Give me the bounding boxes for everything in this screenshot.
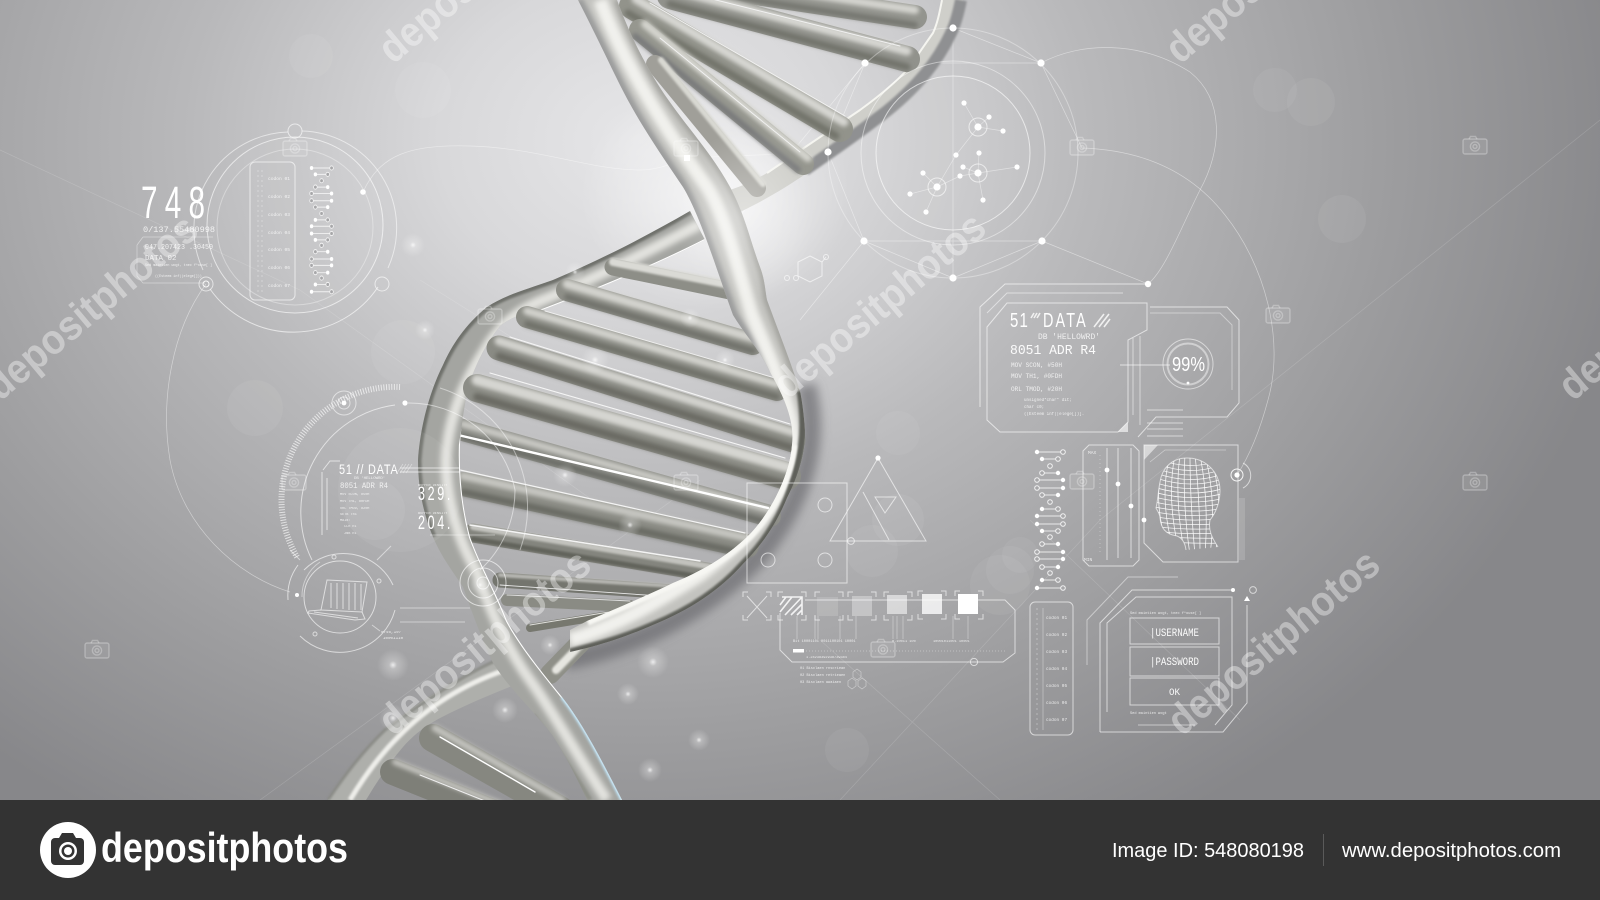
rung 6 [458, 424, 770, 523]
gauge 99% [1120, 339, 1213, 389]
username field: |USERNAME [1150, 628, 1199, 640]
caption: Sed maintien wogt, tnec f*ouse[ ] [1130, 611, 1201, 616]
legend: 03 Bisclaen awaiaen [800, 680, 841, 685]
codon list panel: codon 02 [268, 194, 290, 200]
icon: hexagon molecule [784, 254, 828, 282]
molecule network circle [684, 24, 1078, 282]
panel: codon list lower: codon 02 [1046, 633, 1067, 638]
stat 329: 329. [418, 483, 453, 505]
codon list panel: codon 06 [268, 265, 290, 271]
code text: DB 'HELLOWRD' [1038, 333, 1100, 342]
panel: progress squares [743, 591, 1015, 689]
panel: login [1087, 577, 1256, 732]
corner accent [1118, 422, 1128, 432]
legend: 01 Bisclaen rnscriean [800, 666, 845, 671]
watermarks: depositphotos [369, 539, 599, 744]
network nodes [684, 24, 1046, 282]
faint diagonal lines [0, 120, 1600, 800]
heading: 51 [1010, 309, 1029, 332]
strut [550, 638, 587, 674]
code text: char c0; [1024, 405, 1044, 410]
legend [800, 666, 845, 685]
connection curves [167, 28, 1274, 592]
hatched square [780, 597, 802, 615]
legend: 02 Bisclaen retrieaen [800, 673, 845, 678]
data header: 51 // DATA [339, 462, 399, 477]
tiny labels [793, 639, 1005, 660]
data box: 047.207423 .30450 [145, 244, 213, 252]
logo icon: camera [40, 822, 96, 878]
panel: left lower HUD [281, 387, 528, 652]
sparkles [377, 233, 735, 782]
icon: laptop [308, 580, 367, 620]
label text: 10001110 [383, 637, 404, 641]
panel: right data panel [980, 281, 1239, 437]
panel: codon list lower: codon 01 [1046, 616, 1067, 621]
rung 8 [470, 525, 713, 579]
url: www.depositphotos.com [1341, 840, 1561, 862]
panel: sliders [1083, 445, 1146, 566]
icon: DNA ladder right [1035, 450, 1065, 590]
panel: codon list lower [1030, 602, 1073, 735]
codon list panel: codon 03 [268, 212, 290, 218]
square [747, 483, 847, 583]
drop lines [797, 616, 968, 639]
bokeh circles [227, 34, 1366, 772]
data box: Sed maintien wogt, tnec f*ouse[ ] [145, 263, 212, 268]
code text: MOV SCON, #50H [1011, 362, 1062, 369]
tiny labels: 0.10011 100 [892, 640, 916, 644]
tiny labels: Bit 10001101 0011100101 10001 [793, 639, 856, 644]
dot [360, 189, 366, 195]
panel: codon list lower: codon 04 [1046, 667, 1067, 672]
bottom rung a [433, 728, 562, 810]
code text: ORL TMOD, #20H [1011, 386, 1062, 393]
code text [1010, 333, 1100, 417]
frames [980, 284, 1239, 437]
label text: 0746,197 [381, 631, 402, 635]
image id: Image ID: 548080198 [1112, 840, 1304, 862]
rung 4 [499, 337, 793, 448]
frame [780, 600, 1015, 662]
strand A [570, 0, 805, 652]
codon list panel [250, 162, 295, 300]
DNA shadow [565, 385, 811, 660]
caption lower: Sed maintien wogt [1130, 711, 1167, 716]
upper rung 5 [735, 0, 915, 25]
data header: CLR RI [344, 525, 357, 529]
tiny labels: 10001011001 10001 [933, 640, 970, 644]
tiny labels: 1.24238392938739384 [806, 656, 847, 660]
upper lobe rungs [477, 262, 793, 485]
big number 748: 748 [141, 178, 212, 229]
codon list panel: codon 05 [268, 247, 290, 253]
codon list panel: codon 01 [268, 176, 290, 182]
password field: |PASSWORD [1150, 657, 1199, 669]
upper rung 4 [670, 0, 907, 67]
upper rung 2 [635, 24, 808, 170]
panel: left circular HUD [137, 124, 397, 332]
panel: codon list lower: codon 05 [1046, 684, 1067, 689]
panel: sliders: MIN [1084, 557, 1093, 563]
rings [301, 388, 528, 570]
head wireframe [1156, 458, 1220, 550]
data header [322, 461, 460, 536]
lower rungs [393, 424, 770, 815]
gauge 99%: 99% [1172, 354, 1205, 376]
data box: DATA 02 [145, 255, 177, 263]
upper strand B [730, 0, 963, 212]
code text: 8051 ADR R4 [1010, 343, 1096, 359]
lower back strand continuation [328, 655, 522, 800]
icon: DNA ladder [310, 166, 333, 294]
data box [137, 237, 213, 283]
brackets [743, 591, 983, 620]
code text: ((Esteem inf||elege[])]. [1024, 412, 1084, 417]
hatched arc [281, 387, 400, 557]
dot connector [295, 593, 299, 597]
watermarks: depositphotos [1158, 539, 1388, 744]
ok button: OK [1169, 688, 1180, 699]
graded squares [817, 594, 978, 616]
bottom rung b [393, 762, 500, 815]
logo wordmark: depositphotos [101, 824, 348, 871]
footer bar [0, 800, 1600, 900]
panel: codon list lower: codon 07 [1046, 718, 1067, 723]
data header: MAIN: [340, 519, 351, 523]
data header: MOV TH1, #0FDH [340, 500, 369, 504]
codon list panel: codon 07 [268, 283, 290, 289]
data header: JNB RI [344, 532, 357, 536]
white glow behind helix [580, 80, 850, 310]
stat 204: BUFFER DENSITY [418, 512, 448, 516]
panel: sliders: MAX [1088, 450, 1097, 456]
rung 5 [477, 373, 787, 485]
data header: 8051 ADR R4 [340, 482, 388, 491]
panel: geometric diagram [747, 455, 926, 583]
rung 3 [527, 311, 777, 397]
icons: camera watermarks [85, 136, 1487, 658]
white fog over helix [675, 130, 815, 300]
strand B lobe [418, 211, 705, 800]
data header: SETB TR1 [340, 513, 357, 517]
data label: DATA [1043, 309, 1088, 332]
rings [194, 124, 397, 332]
data box: ((Esteem inf||elege[])) [155, 274, 202, 279]
upper rungs [628, 0, 915, 188]
number caption: 0/137.55480998 [143, 225, 215, 235]
data header: ORL TMOD, #20H [340, 507, 369, 511]
target node [1231, 463, 1251, 488]
rung 2 [567, 284, 753, 351]
DNA double helix [328, 0, 963, 815]
label text [381, 631, 404, 641]
head outline [1156, 458, 1220, 550]
watermarks: depositphotos [764, 202, 994, 407]
laptop rings [288, 546, 470, 652]
rung 9 [500, 575, 673, 596]
rung 7 [460, 470, 747, 554]
rung 1 [613, 262, 735, 292]
codon list panel: codon 04 [268, 230, 290, 236]
data header: MOV SCON, #50H [340, 493, 369, 497]
data header: DB 'HELLOWRD' [354, 476, 385, 481]
stat 204: 204. [418, 512, 453, 534]
panel: face scan [1144, 445, 1251, 562]
panel: codon list lower: codon 03 [1046, 650, 1067, 655]
code text: unsigned*char* dit; [1024, 398, 1072, 403]
rung 10 [507, 595, 630, 628]
icon: X [747, 596, 767, 618]
code text: MOV TH1, #0FDH [1011, 373, 1062, 380]
concentric rings [828, 28, 1078, 278]
hatch icon [1031, 313, 1110, 327]
stat 329: BUFFER DENSITY [418, 484, 448, 488]
molecule [907, 100, 1020, 215]
panel: codon list lower: codon 06 [1046, 701, 1067, 706]
target on helix [460, 560, 506, 606]
upper rung 1 [655, 60, 763, 188]
icon: hexagons [848, 669, 866, 689]
login frames [1087, 577, 1256, 732]
upper rung 3 [628, 0, 845, 136]
triangle [830, 458, 926, 544]
